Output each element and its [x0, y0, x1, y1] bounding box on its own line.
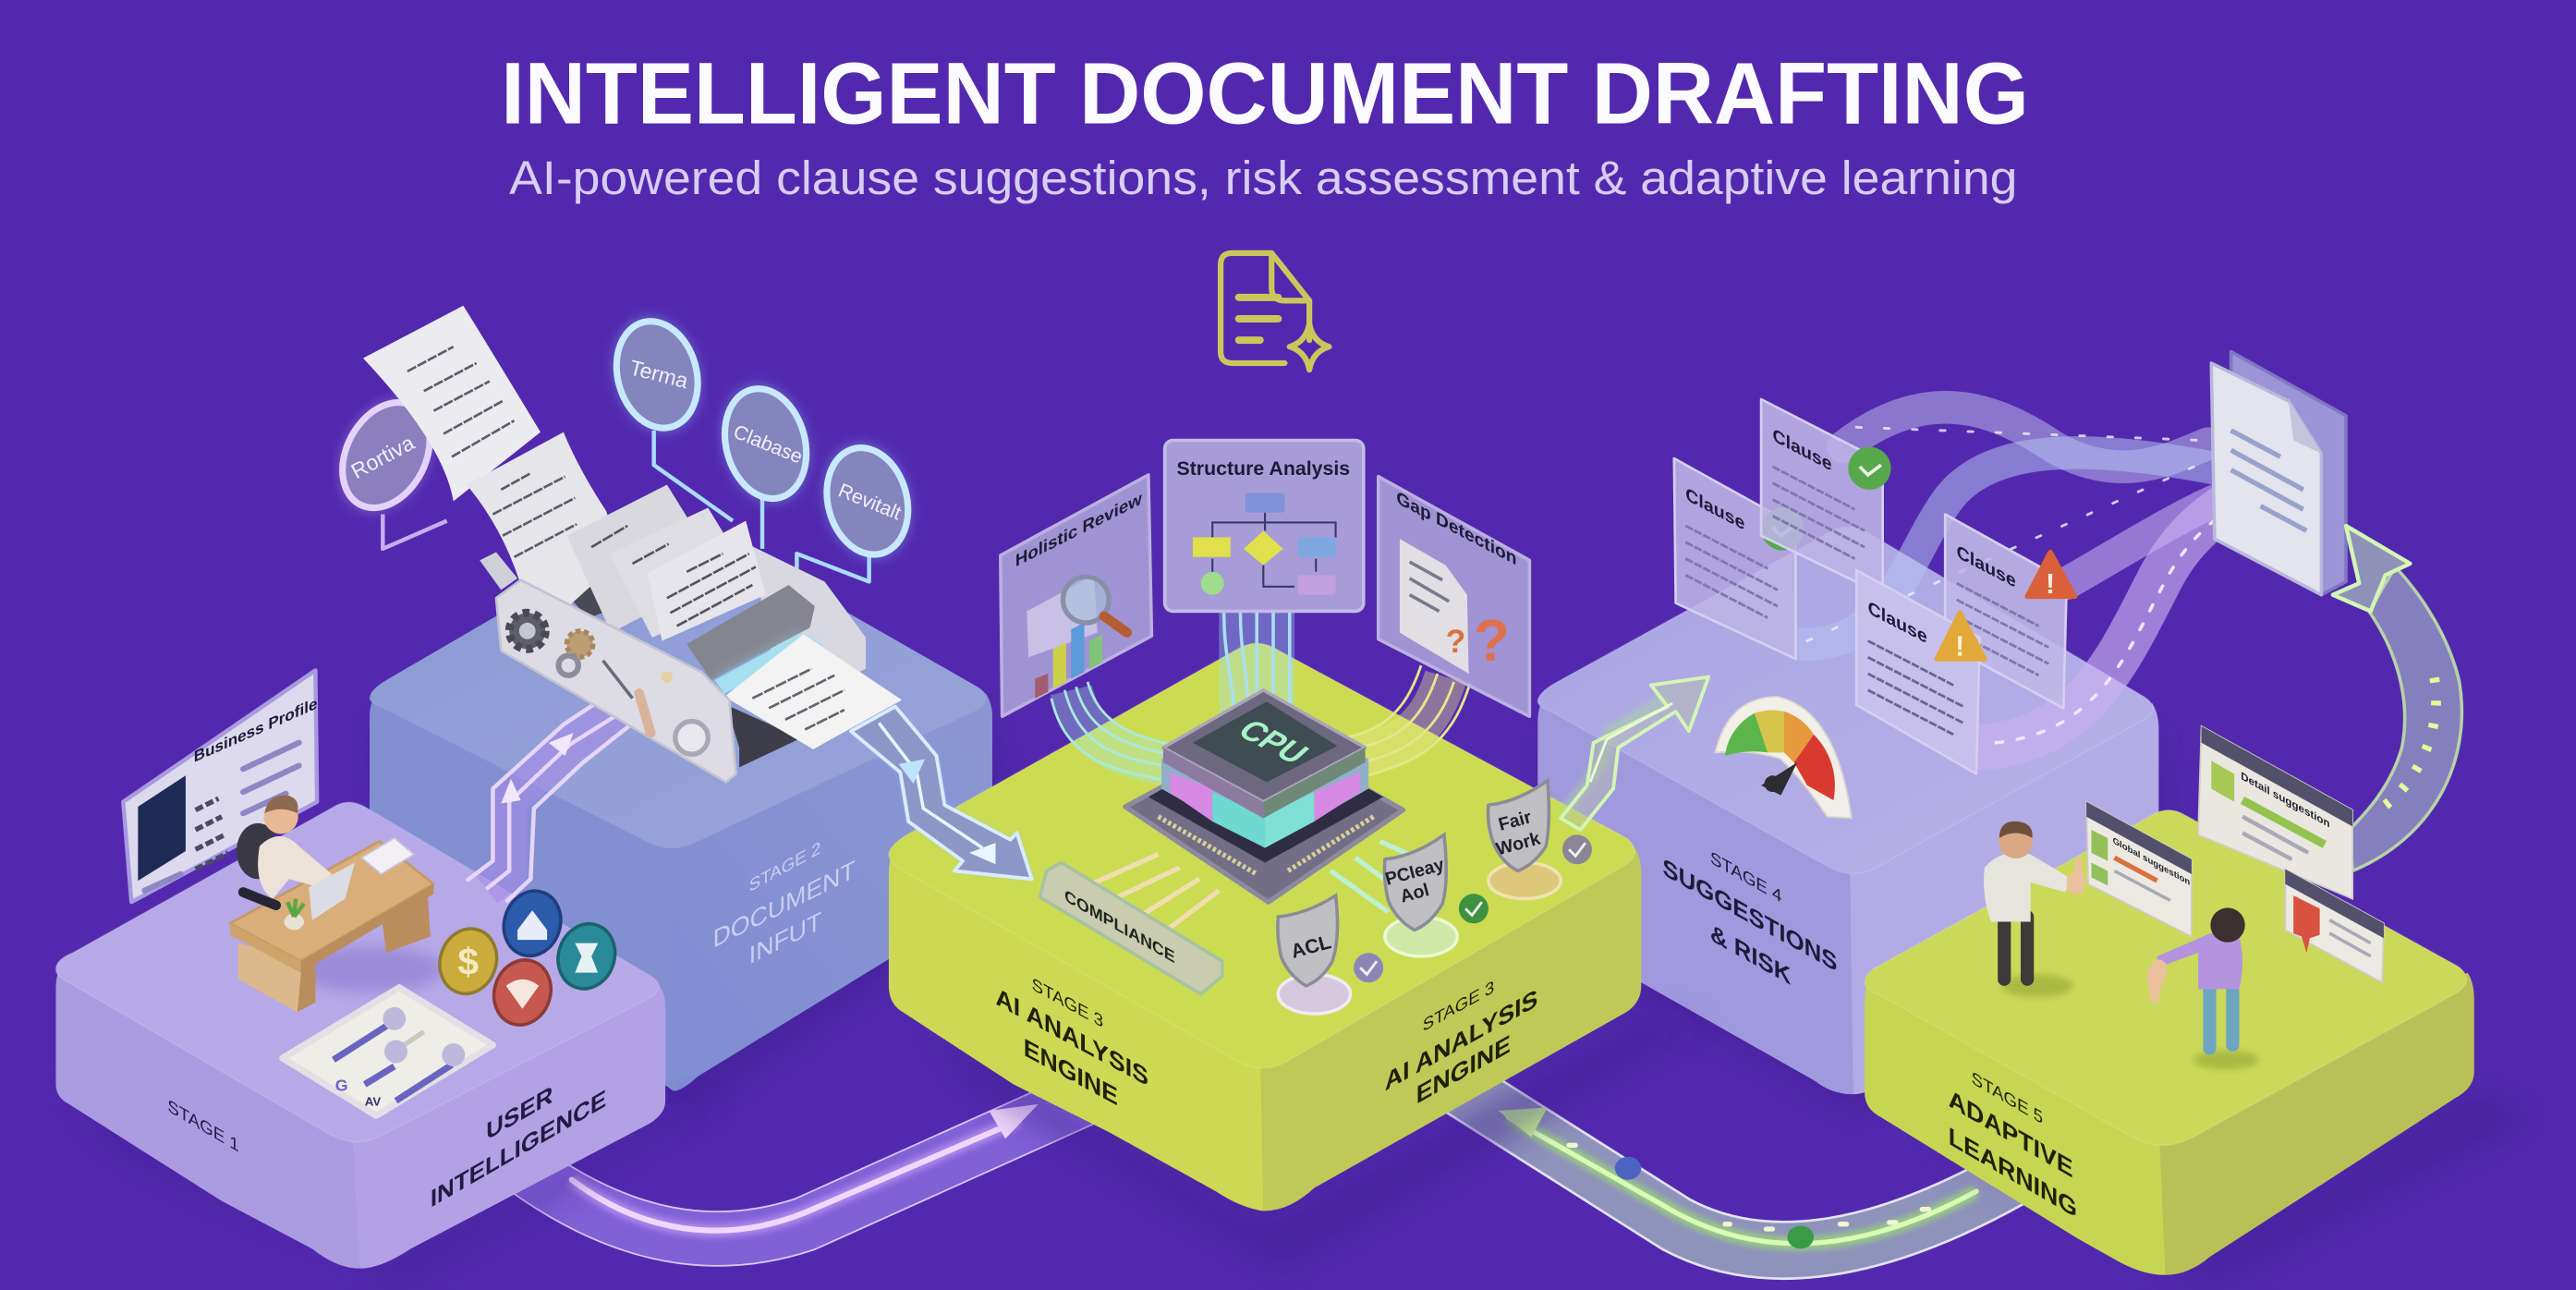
feedback window 2: Detail suggestion — [2241, 770, 2330, 831]
balloon: Revitalt: Revitalt — [835, 480, 905, 524]
stage 5 label: ADAPTIVE — [1949, 1085, 2073, 1184]
stage 5 label: STAGE 5 — [1972, 1068, 2043, 1128]
dark rear roller — [553, 568, 608, 618]
notebook — [361, 838, 414, 874]
clause card 1: Clause — [1685, 484, 1744, 535]
chip: CPU — [1125, 690, 1403, 902]
feedback window 2 — [2198, 726, 2352, 899]
small back tray — [480, 552, 517, 590]
output paper — [724, 634, 902, 749]
stage 3 right label: ENGINE — [1416, 1029, 1511, 1110]
user intelligence label: INTELLIGENCE — [431, 1084, 606, 1212]
chip: CPU: CPU — [1230, 714, 1316, 770]
user intelligence label: USER — [486, 1080, 553, 1146]
stage 3 right label: STAGE 3 — [1423, 977, 1494, 1036]
stage 4 label: & RISK — [1710, 919, 1791, 991]
stage 5 block — [1865, 810, 2538, 1290]
panel: gap detection — [1379, 477, 1529, 716]
person at desk — [237, 795, 332, 906]
feedback window 3 — [2285, 870, 2384, 982]
shield: fair work: Work — [1494, 829, 1543, 859]
title: INTELLIGENT DOCUMENT DRAFTING — [501, 44, 2029, 141]
papers in feed — [566, 485, 766, 640]
panel: structure analysis — [1165, 441, 1364, 611]
arrow: stage 3 to stage 4 — [1561, 677, 1708, 830]
balloon: Terma — [602, 309, 733, 521]
arrows: stage 1 input to machine — [467, 699, 639, 902]
shield: ACL: ACL — [1289, 931, 1333, 963]
business profile card — [123, 670, 318, 902]
plant — [285, 914, 304, 930]
business profile card: Business Profile — [194, 694, 318, 766]
stage 1 block — [55, 802, 723, 1290]
flying paper 1 — [363, 306, 541, 501]
stage 1 label: STAGE 1 — [167, 1096, 239, 1157]
balloon: Rortiva — [322, 383, 450, 549]
clause card 3: Clause — [1957, 542, 2016, 592]
panel: structure analysis: Structure Analysis — [1176, 457, 1350, 480]
balloon: Terma: Terma — [627, 355, 691, 393]
panel: gap detection: Gap Detection — [1396, 487, 1516, 569]
stage 2 block — [370, 518, 1018, 1117]
shield: policy act — [1383, 834, 1488, 956]
flying paper 2 — [467, 432, 621, 608]
crank handle — [603, 661, 633, 699]
stage 3 left label: AI ANALYSIS — [996, 982, 1148, 1092]
floor flow: stage 5 back to stage 3 — [1429, 1068, 2037, 1250]
desk with person — [230, 795, 444, 1012]
compliance bar — [1040, 863, 1222, 994]
stage 2 label: INFUT — [749, 906, 821, 969]
panel: holistic review — [1001, 475, 1151, 716]
stage 5 label — [1949, 1068, 2077, 1224]
machine far plate — [751, 545, 866, 690]
floor flow: stage 1 to stage 3 — [501, 1077, 1134, 1239]
stage 4 block — [1537, 527, 2193, 1117]
stage 4 label: SUGGESTIONS — [1662, 853, 1837, 977]
feedback window 1 — [2086, 802, 2192, 937]
icon: document with sparkle — [1221, 253, 1329, 370]
shield: policy act: Aol — [1398, 880, 1431, 907]
balloon: Clabase: Clabase — [730, 420, 806, 469]
stage 5 label: LEARNING — [1949, 1122, 2077, 1224]
clause card 1 — [1674, 458, 1804, 659]
panel: gap detection: ? — [1446, 623, 1465, 660]
gears — [509, 613, 545, 649]
wires: panels to chip — [1051, 611, 1470, 937]
clause card 4 — [1856, 570, 1985, 773]
shield: policy act: PCIeay — [1383, 855, 1447, 890]
balloon: Revitalt — [796, 435, 922, 591]
stage 4 label: STAGE 4 — [1710, 848, 1781, 907]
stage 2 label: DOCUMENT — [713, 854, 856, 954]
slider panel — [283, 988, 492, 1115]
slider panel: AV — [365, 1095, 381, 1109]
clause card 2 — [1761, 399, 1891, 595]
shield: fair work — [1488, 781, 1592, 899]
stage 3 left label: ENGINE — [1024, 1033, 1118, 1112]
gauge — [1715, 697, 1852, 818]
machine dark base — [726, 705, 798, 767]
shield: ACL — [1278, 895, 1383, 1014]
stage 2 label: STAGE 2 — [749, 838, 820, 896]
panel: holistic review: Holistic Review — [1015, 489, 1142, 571]
subtitle: AI-powered clause suggestions, risk assessment & adaptive learning — [509, 152, 2017, 204]
document machine — [363, 306, 902, 782]
icons: policy coins: $ — [457, 940, 479, 982]
stage 3 block — [889, 643, 1700, 1273]
final document — [2211, 352, 2346, 595]
panel: gap detection: ? — [1474, 607, 1510, 674]
stage 3 left label: STAGE 3 — [1032, 975, 1103, 1032]
shield: fair work: Fair — [1496, 807, 1534, 835]
clause card 2: Clause — [1773, 425, 1832, 476]
icons: policy coins — [431, 883, 624, 1032]
stage 3 right label: AI ANALYSIS — [1385, 984, 1537, 1097]
clause card 4: Clause — [1868, 597, 1927, 648]
blue glow — [714, 634, 823, 693]
person: thumbs up — [1984, 821, 2085, 997]
roller — [687, 585, 815, 680]
clause card 4: ! — [1955, 631, 1964, 662]
balloon: Rortiva: Rortiva — [347, 431, 419, 483]
person: thumbs down — [2147, 907, 2259, 1070]
laptop — [309, 863, 355, 920]
clause card 3: ! — [2046, 569, 2055, 600]
compliance bar: COMPLIANCE — [1064, 887, 1175, 968]
slider panel: G — [335, 1077, 348, 1095]
clause card 3 — [1945, 515, 2075, 708]
feedback window 1: Global suggestion — [2113, 836, 2190, 888]
loop arrow: stage 5 to document — [2333, 526, 2461, 870]
balloon: Clabase — [711, 376, 820, 549]
arrow: machine output to stage 3 — [851, 707, 1032, 879]
clause ribbons to document — [1799, 408, 2289, 748]
front plate — [496, 580, 736, 782]
